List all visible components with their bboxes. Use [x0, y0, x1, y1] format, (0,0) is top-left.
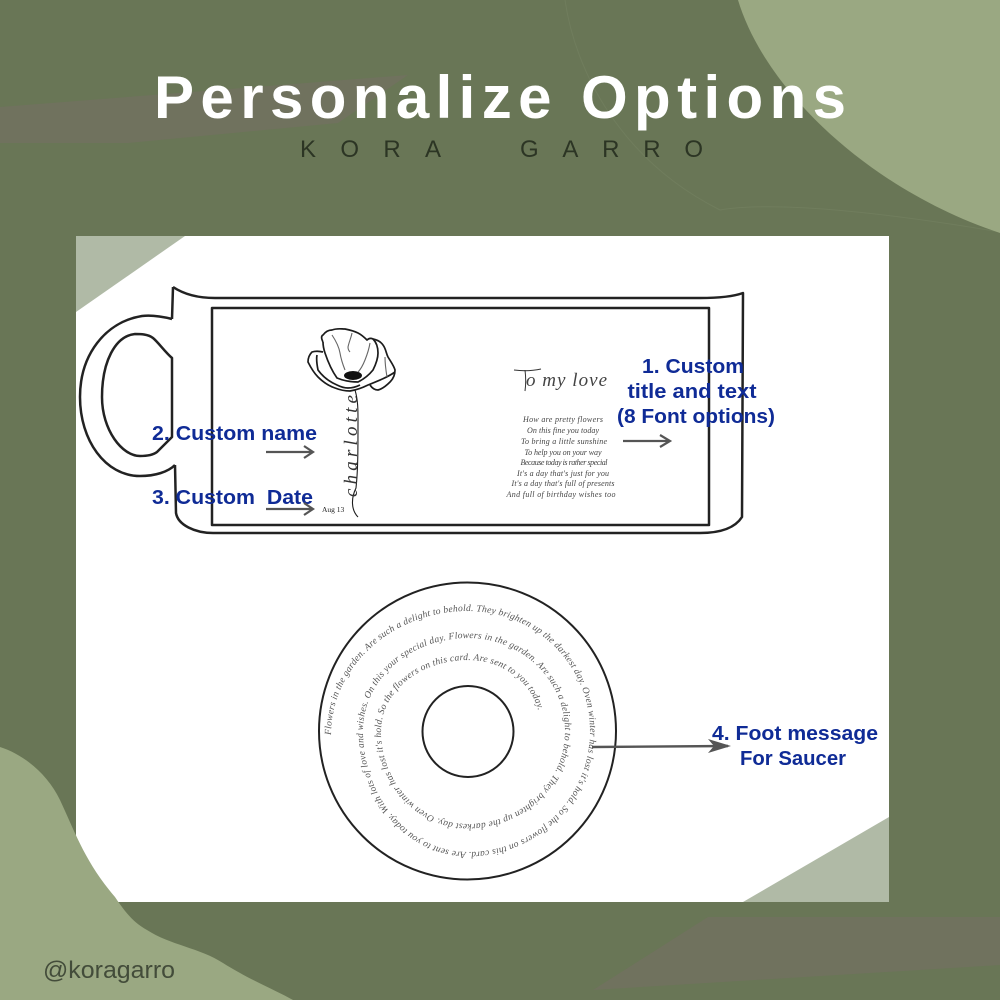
poem text: How are pretty flowers — [522, 415, 603, 424]
flower centre — [344, 371, 362, 380]
arrow 2 — [266, 446, 313, 458]
subtitle: brand: KORA — [300, 136, 441, 163]
custom date: Aug 13 — [322, 505, 345, 514]
poem text: To help you on your way — [524, 448, 602, 457]
label 4: foot message for saucer: For Saucer — [740, 748, 846, 770]
poem text: On this fine you today — [527, 426, 599, 435]
subtitle: brand: GARRO — [520, 136, 703, 163]
label 4: foot message for saucer — [712, 723, 878, 770]
poem title: o my love — [526, 370, 607, 391]
label 1: custom title and text: title and text — [628, 381, 757, 403]
saucer inner circle — [422, 686, 514, 777]
poem text: To bring a little sunshine — [521, 437, 607, 446]
label 2: custom name: 2. Custom name — [152, 423, 317, 445]
saucer — [318, 582, 617, 880]
arrow 3 — [266, 503, 313, 515]
panel: white product sheet — [76, 236, 889, 902]
handle watermark: @koragarro — [43, 957, 175, 984]
title: Personalize Options — [154, 64, 846, 131]
background: light blob bottom left — [0, 747, 293, 1000]
poem text: It's a day that's full of presents — [510, 479, 614, 488]
subtitle: brand — [300, 136, 703, 163]
label 1: custom title and text — [617, 356, 775, 428]
label 1: custom title and text: 1. Custom — [642, 356, 744, 378]
poem text: It's a day that's just for you — [516, 469, 609, 478]
poem text: And full of birthday wishes too — [506, 490, 616, 499]
mug handle outer — [80, 287, 175, 476]
background: taupe shape bottom right — [593, 917, 1000, 990]
print area frame — [212, 308, 709, 525]
poppy flower illustration — [308, 329, 395, 517]
label 1: custom title and text: (8 Font options) — [617, 406, 775, 428]
background: light blob top right — [738, 0, 1000, 233]
arrow 1 — [623, 435, 670, 447]
corner triangle top left — [76, 236, 185, 312]
mug body — [173, 287, 743, 533]
poem text: Because today is rather special — [520, 458, 608, 467]
background: taupe shape top left — [0, 75, 408, 143]
custom name on stem: charlotte — [341, 395, 362, 497]
arrow 4 — [592, 739, 731, 753]
label 3: custom date: 3. Custom Date — [152, 487, 313, 509]
corner triangle bottom right — [743, 817, 889, 902]
poem text — [506, 415, 616, 499]
label 4: foot message for saucer: 4. Foot message — [712, 723, 878, 745]
mug outline — [80, 287, 743, 533]
saucer spiral message: Flowers in the garden. Are such a delight to behold. They brighten up the darkest day. Oven winter has lost it's hold. So the flowers on this card. Are sent to you today. With lots of love and wishes. On this your special day. Flowers in the garden. Are such a delight to behold. They brighten up the darkest day. Oven winter has lost it's hold. So the flowers on this card. Are sent to you today. — [324, 604, 596, 858]
background: thin contour line — [565, 0, 1000, 232]
saucer outer rim — [319, 582, 616, 880]
stem — [352, 390, 358, 517]
mug handle inner — [102, 334, 172, 456]
